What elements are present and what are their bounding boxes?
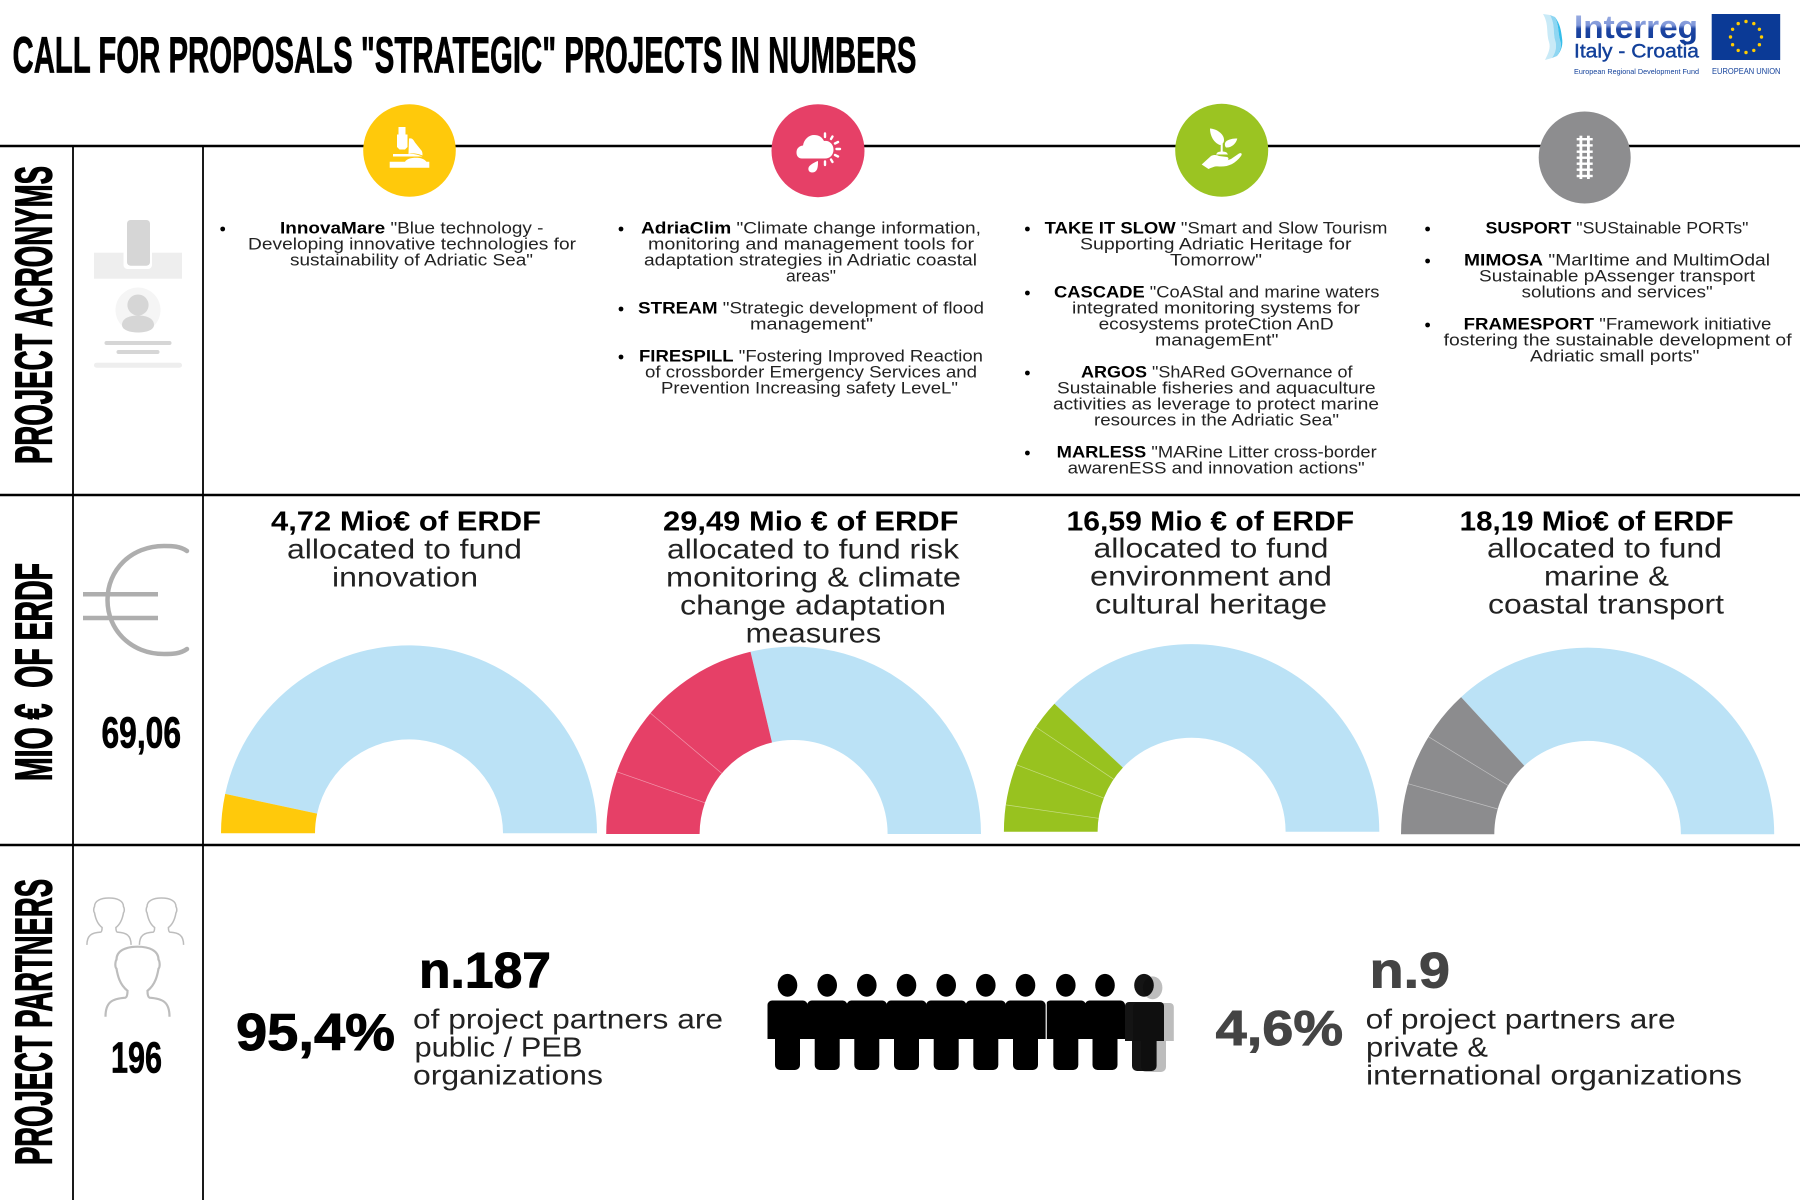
heading: innovation funding: allocated to fund bbox=[287, 533, 522, 564]
text: MARLESS: MARLESS "MARine Litter cross-border bbox=[1057, 444, 1377, 462]
text: MIMOSA: MIMOSA "MarItime and MultimOdal bbox=[1464, 252, 1770, 270]
text: public partners description bbox=[413, 1003, 723, 1090]
text: InnovaMare: InnovaMare "Blue technology - bbox=[280, 220, 544, 238]
heading: climate funding: change adaptation bbox=[680, 590, 946, 621]
text: ARGOS: resources in the Adriatic Sea" bbox=[1094, 412, 1339, 430]
text: STREAM: STREAM "Strategic development of flood bbox=[638, 300, 984, 318]
text: MARLESS: awarenESS and innovation actions" bbox=[1068, 460, 1365, 478]
chart: climate half donut bbox=[606, 647, 981, 834]
heading: transport funding bbox=[1460, 506, 1734, 619]
text: public partners description: of project partners are bbox=[413, 1003, 723, 1034]
heading: transport funding: coastal transport bbox=[1488, 588, 1724, 619]
text: FIRESPILL: Prevention Increasing safety LeveL" bbox=[661, 380, 958, 398]
text: AdriaClim: AdriaClim "Climate change information, bbox=[641, 220, 981, 238]
heading: climate funding: measures bbox=[746, 618, 881, 649]
text: FRAMESPORT: fostering the sustainable development of bbox=[1444, 332, 1792, 350]
text: CASCADE: integrated monitoring systems for bbox=[1072, 300, 1361, 318]
icon: three partners bbox=[87, 898, 184, 1017]
text: private partners description: international organizations bbox=[1366, 1059, 1742, 1090]
logo: Interreg Italy - Croatia and EU flag bbox=[1543, 9, 1780, 76]
text: FIRESPILL: FIRESPILL "Fostering Improved Reaction bbox=[639, 348, 983, 366]
bullet bbox=[220, 227, 225, 231]
Italy - Croatia: Italy - Croatia bbox=[1574, 42, 1699, 62]
stat: private partners count: n.9 bbox=[1370, 942, 1450, 998]
text: ARGOS: activities as leverage to protect marine bbox=[1053, 396, 1379, 414]
text: AdriaClim: areas" bbox=[786, 268, 836, 286]
icon: Interreg waves bbox=[1543, 14, 1562, 60]
chart: transport half donut bbox=[1401, 648, 1774, 834]
text: InnovaMare bbox=[248, 220, 577, 270]
heading: innovation funding: innovation bbox=[332, 562, 478, 593]
text: TAKE IT SLOW: Supporting Adriatic Heritage for bbox=[1080, 236, 1352, 254]
panel: acronyms innovation bbox=[220, 220, 577, 270]
chart: environment half donut bbox=[1004, 644, 1379, 832]
stat: private partners share: 4,6% bbox=[1216, 1002, 1343, 1056]
bullets bbox=[1425, 227, 1430, 327]
EU flag bbox=[1712, 14, 1780, 60]
heading: environment funding: cultural heritage bbox=[1095, 588, 1327, 619]
bullets bbox=[1025, 227, 1030, 455]
heading: climate funding: monitoring & climate bbox=[666, 562, 961, 593]
text: STREAM bbox=[638, 300, 984, 334]
pictogram: last partner overlapping bbox=[1125, 974, 1164, 1071]
project icon: innovation bbox=[363, 104, 456, 197]
text: FRAMESPORT bbox=[1444, 316, 1792, 366]
text: MIMOSA: Sustainable pAssenger transport bbox=[1479, 268, 1755, 286]
text: TAKE IT SLOW bbox=[1045, 220, 1387, 270]
heading: transport funding: 18,19 Mio€ of ERDF bbox=[1460, 506, 1734, 537]
heading: climate funding: 29,49 Mio € of ERDF bbox=[663, 506, 958, 537]
heading: innovation funding: 4,72 Mio€ of ERDF bbox=[271, 506, 541, 537]
heading: innovation funding bbox=[271, 506, 541, 593]
EUROPEAN UNION: EUROPEAN UNION bbox=[1712, 66, 1780, 76]
text: TAKE IT SLOW: TAKE IT SLOW "Smart and Slow Tourism bbox=[1045, 220, 1387, 238]
heading: environment funding bbox=[1066, 506, 1354, 619]
text: TAKE IT SLOW: Tomorrow" bbox=[1170, 252, 1262, 270]
bullets bbox=[619, 227, 623, 359]
text: private partners description bbox=[1366, 1003, 1742, 1090]
project icon: climate bbox=[772, 104, 864, 197]
icon: euro sign bbox=[83, 546, 187, 654]
text: public partners description: public / PEB bbox=[414, 1032, 582, 1063]
stat: public partners count: n.187 bbox=[419, 942, 551, 998]
heading: climate funding: allocated to fund risk bbox=[667, 533, 960, 564]
heading: environment funding: 16,59 Mio € of ERDF bbox=[1066, 506, 1354, 537]
panel: acronyms climate bbox=[619, 220, 984, 398]
text: InnovaMare: Developing innovative technologies for bbox=[248, 236, 577, 254]
pictogram: nine black people bbox=[768, 974, 1125, 1070]
heading: transport funding: allocated to fund bbox=[1487, 532, 1722, 563]
total partners figure: 196 bbox=[111, 1033, 162, 1082]
text: FRAMESPORT: FRAMESPORT "Framework initiative bbox=[1464, 316, 1771, 334]
heading: environment funding: environment and bbox=[1090, 561, 1332, 592]
project icon: environment bbox=[1175, 104, 1268, 197]
row label: mio euro of ERDF: MIO € OF ERDF bbox=[6, 563, 64, 781]
pictogram: row of ten people bbox=[768, 974, 1174, 1072]
text: MIMOSA: solutions and services" bbox=[1522, 284, 1713, 302]
stat: public partners share: 95,4% bbox=[236, 1004, 395, 1062]
project icon: marine and coastal transport bbox=[1539, 112, 1631, 204]
title: CALL FOR PROPOSALS "STRATEGIC" PROJECTS IN NUMBERS bbox=[12, 27, 916, 84]
text: AdriaClim bbox=[641, 220, 981, 286]
text: CASCADE: CASCADE "CoAStal and marine waters bbox=[1054, 284, 1380, 302]
text: AdriaClim: adaptation strategies in Adriatic coastal bbox=[644, 252, 977, 270]
text: private partners description: private & bbox=[1366, 1032, 1488, 1063]
text: ARGOS: Sustainable fisheries and aquaculture bbox=[1057, 380, 1376, 398]
heading: climate funding bbox=[663, 506, 961, 649]
row label: project partners: PROJECT PARTNERS bbox=[6, 879, 64, 1165]
text: CASCADE: ecosystems proteCtion AnD bbox=[1099, 316, 1334, 334]
text: private partners description: of project partners are bbox=[1366, 1003, 1676, 1034]
pictogram: grey private partner bbox=[1133, 976, 1174, 1072]
panel: acronyms environment bbox=[1025, 220, 1387, 478]
panel: acronyms transport bbox=[1425, 220, 1792, 366]
text: FRAMESPORT: Adriatic small ports" bbox=[1530, 348, 1700, 366]
text: AdriaClim: monitoring and management tools for bbox=[648, 236, 975, 254]
text: ARGOS bbox=[1053, 364, 1379, 430]
text: public partners description: organizations bbox=[413, 1059, 603, 1090]
text: MIMOSA bbox=[1464, 252, 1770, 302]
text: CASCADE: managemEnt" bbox=[1155, 332, 1279, 350]
text: FIRESPILL bbox=[639, 348, 983, 398]
heading: environment funding: allocated to fund bbox=[1094, 532, 1328, 563]
total ERDF figure: 69,06 bbox=[102, 708, 181, 757]
text: ARGOS: ARGOS "ShARed GOvernance of bbox=[1081, 364, 1353, 382]
icon: ID badge bbox=[94, 220, 182, 368]
text: STREAM: management" bbox=[750, 316, 873, 334]
text: CASCADE bbox=[1054, 284, 1380, 350]
Interreg wordmark: Interreg bbox=[1574, 9, 1698, 45]
heading: transport funding: marine & bbox=[1544, 561, 1669, 592]
text: InnovaMare: sustainability of Adriatic Sea" bbox=[290, 252, 533, 270]
chart: innovation half donut bbox=[221, 645, 597, 833]
European Regional Development Fund: European Regional Development Fund bbox=[1574, 67, 1699, 76]
text: SUSPORT: SUSPORT "SUStainable PORTs" bbox=[1486, 220, 1749, 238]
text: FIRESPILL: of crossborder Emergency Services and bbox=[645, 364, 977, 382]
text: MARLESS bbox=[1057, 444, 1377, 478]
